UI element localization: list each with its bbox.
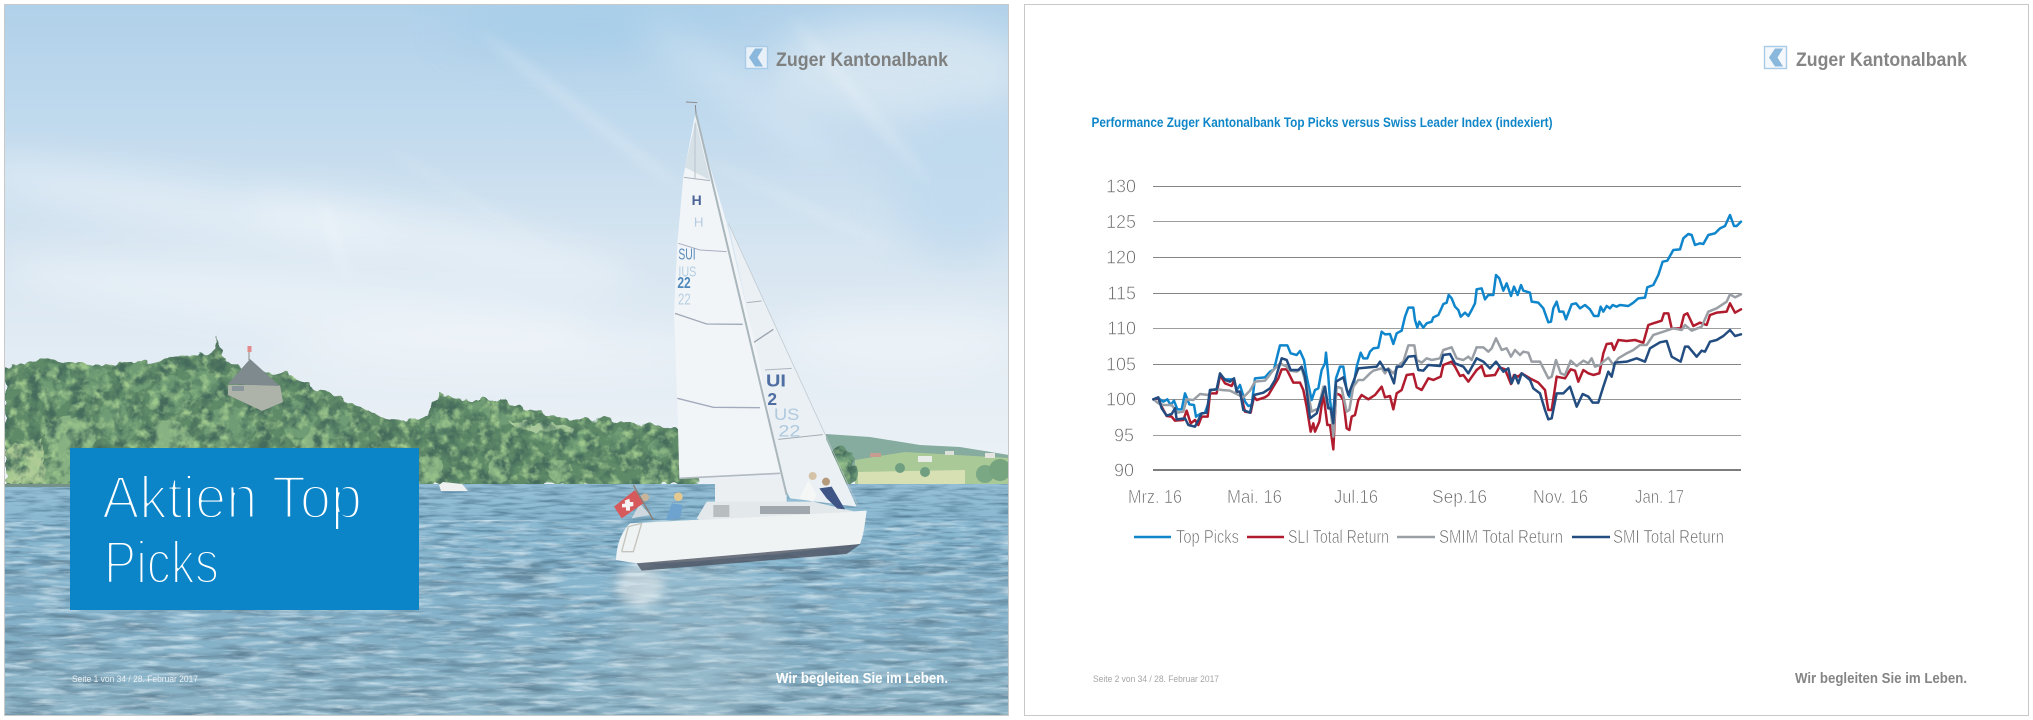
y axis labels: 100 bbox=[1106, 390, 1136, 410]
footer: slogan, cover: Wir begleiten Sie im Leben. bbox=[776, 670, 948, 687]
sail markings: H bbox=[694, 215, 703, 230]
small distant boat bbox=[439, 482, 468, 491]
mainsail bbox=[674, 115, 780, 478]
blue title box bbox=[70, 448, 419, 610]
logo: Zuger Kantonalbank: Zuger Kantonalbank bbox=[1796, 50, 1967, 71]
stern ladder bbox=[622, 523, 642, 552]
y axis labels: 125 bbox=[1106, 212, 1136, 232]
logo: Zuger Kantonalbank, cover bbox=[746, 46, 948, 71]
y axis labels: 130 bbox=[1106, 176, 1136, 196]
y axis labels: 120 bbox=[1106, 248, 1136, 268]
y axis labels: 110 bbox=[1107, 318, 1136, 338]
title: Aktien Top Picks bbox=[102, 464, 362, 596]
deck and cabin bbox=[697, 502, 855, 520]
footer: page note: Seite 2 von 34 / 28. Februar 2017 bbox=[1093, 674, 1219, 684]
lake water bbox=[5, 484, 1009, 720]
Swiss flag bbox=[614, 485, 653, 520]
distant hill and village bbox=[826, 434, 1011, 484]
panel: cover page bbox=[0, 0, 1030, 720]
legend: SMIM Total Return bbox=[1439, 527, 1563, 547]
sky bbox=[0, 0, 1030, 495]
crew bbox=[799, 480, 817, 502]
page border bbox=[1024, 4, 2028, 716]
legend: SMI Total Return bbox=[1613, 527, 1724, 547]
sail markings: 2 bbox=[767, 389, 777, 409]
y axis labels bbox=[1106, 176, 1136, 480]
sailing boat bbox=[614, 102, 867, 571]
x axis labels: Sep.16 bbox=[1432, 487, 1487, 507]
photo: lake with sailing boat bbox=[0, 0, 1030, 720]
x axis labels bbox=[1128, 487, 1684, 507]
series: Top Picks bbox=[1153, 215, 1741, 420]
logo: Zuger Kantonalbank, cover: Zuger Kantonalbank bbox=[776, 50, 948, 71]
sail markings: H bbox=[692, 192, 702, 208]
series: SMIM Total Return bbox=[1153, 294, 1741, 437]
sail markings: US bbox=[774, 405, 799, 424]
y axis labels: 90 bbox=[1114, 460, 1134, 480]
legend: SLI Total Return bbox=[1288, 527, 1389, 547]
logo: Zuger Kantonalbank bbox=[1764, 46, 1967, 71]
castle bbox=[228, 346, 283, 411]
sail markings: SUI bbox=[678, 246, 696, 263]
sail markings: 22 bbox=[678, 292, 691, 309]
legend: Top Picks bbox=[1176, 527, 1239, 547]
legend bbox=[1134, 527, 1724, 547]
cabin sail cover bbox=[715, 484, 787, 502]
series: SMI Total Return bbox=[1153, 330, 1741, 427]
cover border bbox=[4, 4, 1008, 716]
data lines bbox=[1153, 215, 1741, 449]
grid lines bbox=[1153, 186, 1741, 470]
sail markings: UI bbox=[766, 371, 786, 391]
title: Aktien Top Picks: Picks bbox=[104, 529, 219, 596]
sail markings: IUS bbox=[678, 265, 696, 281]
sail markings bbox=[677, 192, 800, 441]
jib bbox=[728, 223, 857, 507]
y axis labels: 105 bbox=[1106, 354, 1136, 374]
series: SLI Total Return bbox=[1153, 303, 1741, 449]
sail markings: 22 bbox=[778, 422, 800, 441]
mast bbox=[696, 113, 787, 495]
x axis labels: Mai. 16 bbox=[1227, 487, 1282, 507]
x axis labels: Jan. 17 bbox=[1635, 487, 1684, 507]
x axis labels: Jul.16 bbox=[1334, 487, 1378, 507]
y axis labels: 115 bbox=[1107, 284, 1136, 304]
footer: page note, cover: Seite 1 von 34 / 28. Februar 2017 bbox=[72, 674, 198, 684]
title: Aktien Top Picks: Aktien Top bbox=[102, 464, 362, 531]
x axis labels: Nov. 16 bbox=[1533, 487, 1588, 507]
x axis labels: Mrz. 16 bbox=[1128, 487, 1182, 507]
footer: slogan: Wir begleiten Sie im Leben. bbox=[1795, 670, 1967, 687]
hull bbox=[616, 511, 867, 563]
panel: performance chart page bbox=[1024, 4, 2028, 716]
y axis labels: 95 bbox=[1114, 426, 1134, 446]
sail markings: 22 bbox=[677, 275, 691, 292]
chart heading: Performance Zuger Kantonalbank Top Picks versus Swiss Leader Index (indexiert) bbox=[1092, 114, 1552, 130]
line chart bbox=[1106, 176, 1741, 547]
tree covered hills bbox=[5, 338, 859, 486]
